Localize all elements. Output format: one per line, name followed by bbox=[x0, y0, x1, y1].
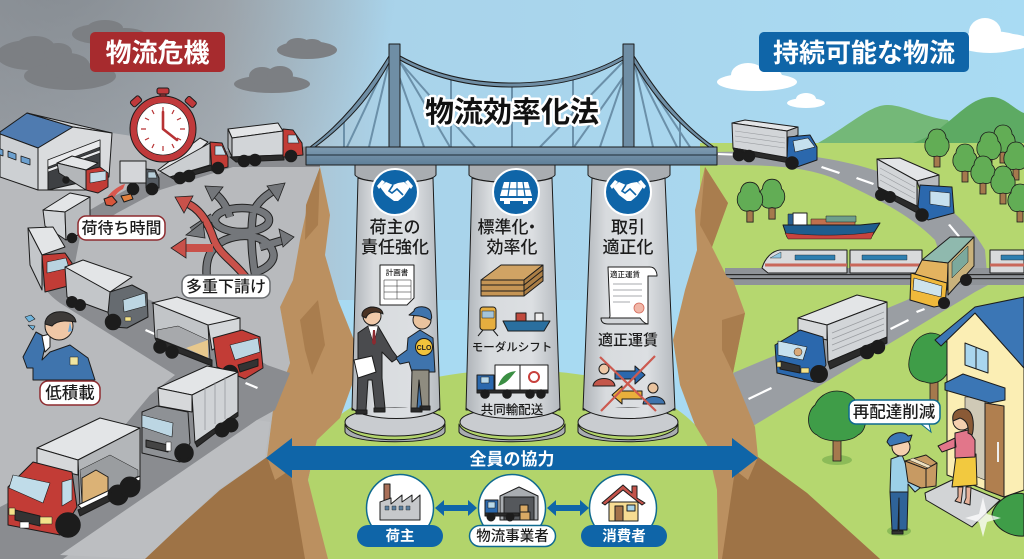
pillar 1: 荷主の責任強化 bbox=[345, 165, 445, 442]
pillar 3 heading bbox=[602, 218, 654, 257]
title: 物流効率化法: 物流効率化法 bbox=[425, 96, 599, 129]
callout: 再配達削減: 再配達削減 bbox=[853, 402, 936, 422]
stakeholder: 物流事業者: 物流事業者 bbox=[476, 528, 549, 545]
truck: blue top bbox=[732, 120, 817, 168]
sparkle bbox=[965, 497, 1001, 537]
truck: grey large bbox=[142, 366, 238, 462]
arrow: 物流事業者–消費者 bbox=[547, 500, 589, 516]
label: 低積載 bbox=[40, 381, 100, 405]
bridge bbox=[306, 44, 717, 165]
icon: handshake bbox=[372, 169, 418, 215]
label: 多重下請け: 多重下請け bbox=[186, 278, 266, 296]
warehouse bbox=[0, 113, 112, 190]
center green ground bbox=[308, 370, 717, 559]
pillar 1 heading: 荷主の bbox=[370, 218, 420, 237]
arrow: 全員の協力 bbox=[266, 438, 758, 478]
icon: train bbox=[478, 307, 498, 336]
heading: 物流危機 bbox=[90, 32, 225, 72]
white clouds bbox=[717, 18, 1024, 108]
label: モーダルシフト: モーダルシフト bbox=[472, 340, 552, 354]
truck: grey small bbox=[120, 161, 159, 193]
right road bbox=[717, 152, 988, 426]
icon: plan document: 計画書 bbox=[386, 267, 409, 277]
stakeholder: 荷主: 荷主 bbox=[386, 527, 414, 545]
label: 多重下請け bbox=[182, 275, 270, 298]
stakeholder: 消費者: 消費者 bbox=[602, 527, 646, 545]
storm clouds bbox=[0, 20, 337, 93]
icon: wooden pallets bbox=[481, 265, 543, 296]
left winding road bbox=[0, 146, 320, 559]
pillar 1 heading bbox=[361, 218, 429, 257]
pillar 2 heading bbox=[478, 218, 540, 257]
truck: rear white bbox=[43, 193, 90, 242]
left cliff bbox=[143, 167, 356, 559]
label: 適正運賃: 適正運賃 bbox=[598, 331, 658, 349]
icon: pallet bbox=[493, 169, 539, 215]
icon: handshake bbox=[605, 169, 651, 215]
truck: red top 1 bbox=[228, 123, 303, 165]
icon: container ship bbox=[783, 213, 880, 239]
right ground bbox=[700, 143, 1024, 559]
house bbox=[925, 297, 1024, 536]
truck: blue middle bbox=[877, 158, 954, 220]
icon: contract scroll bbox=[601, 267, 657, 324]
mountains bbox=[818, 97, 1024, 143]
icon: joint delivery truck bbox=[477, 365, 548, 397]
truck: in warehouse dock bbox=[57, 156, 108, 193]
label: 荷待ち時間: 荷待ち時間 bbox=[81, 220, 162, 238]
icon: stopwatch bbox=[130, 88, 197, 162]
arrow: 全員の協力: 全員の協力 bbox=[470, 450, 554, 469]
train bbox=[762, 250, 1024, 273]
truck: red top 2 bbox=[158, 138, 228, 182]
icon: ship bbox=[503, 313, 550, 331]
pillar 3 heading: 適正化 bbox=[602, 238, 654, 257]
icon: crossed-out unfair trade bbox=[593, 356, 665, 411]
icon: truck at warehouse bbox=[485, 487, 538, 520]
pillar 1 heading: 責任強化 bbox=[361, 238, 429, 257]
pillar 2 heading: 標準化・ bbox=[478, 218, 540, 237]
customer woman bbox=[938, 409, 977, 505]
pillar 2 heading: 効率化 bbox=[486, 238, 538, 257]
pillar 3: 取引適正化 bbox=[578, 165, 678, 442]
trees: upper right bbox=[737, 125, 1024, 222]
stakeholder: 物流事業者 bbox=[470, 474, 556, 546]
icon: tangled subcontract arrows bbox=[171, 183, 294, 280]
delivery worker with parcel bbox=[887, 433, 937, 536]
callout: 再配達削減 bbox=[849, 400, 940, 432]
label: 共同輸配送: 共同輸配送 bbox=[481, 402, 544, 417]
pillar 2: 標準化・効率化 bbox=[459, 165, 565, 442]
icon: house bbox=[602, 485, 645, 521]
businessman bbox=[354, 307, 398, 414]
label: 荷待ち時間 bbox=[78, 216, 165, 240]
truck: grey queued bbox=[65, 260, 148, 328]
heading: 持続可能な物流 bbox=[759, 32, 969, 72]
left ground bbox=[0, 113, 320, 559]
truck: blue large front bbox=[775, 295, 887, 382]
pillar 3 heading: 取引 bbox=[611, 218, 645, 237]
CLO worker bbox=[396, 307, 435, 412]
heading: 物流危機: 物流危機 bbox=[105, 38, 210, 68]
truck: red low-load front bbox=[8, 418, 140, 535]
CLO worker: CLO bbox=[417, 345, 432, 352]
stakeholder: 消費者 bbox=[581, 474, 667, 547]
icon: factory bbox=[380, 484, 420, 520]
truck: red half-empty bbox=[152, 297, 263, 379]
truck: yellow with colorful cargo bbox=[910, 237, 974, 307]
stakeholder: 荷主 bbox=[357, 474, 443, 547]
truck: red queued bbox=[28, 227, 72, 292]
heading: 持続可能な物流: 持続可能な物流 bbox=[773, 38, 955, 68]
icon: collision debris bbox=[104, 184, 133, 206]
arrow: 荷主–物流事業者 bbox=[435, 500, 477, 516]
right cliff bbox=[673, 167, 880, 559]
sky background bbox=[0, 0, 1024, 300]
icon: plan document bbox=[380, 265, 414, 305]
label: 低積載: 低積載 bbox=[45, 384, 95, 402]
rail track bbox=[725, 268, 1024, 285]
tired driver bbox=[23, 312, 95, 380]
icon: contract scroll: 適正運賃 bbox=[610, 269, 640, 279]
trees: lower right bbox=[808, 333, 950, 465]
